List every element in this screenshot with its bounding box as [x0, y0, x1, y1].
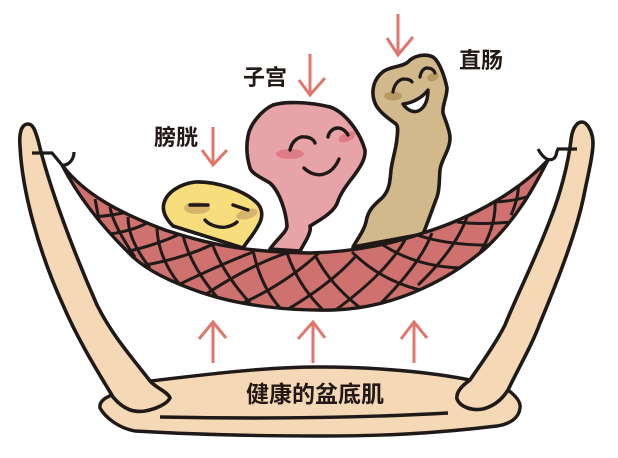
label: healthy pelvic floor muscles: 健康的盆底肌: [246, 381, 384, 407]
rectum blush: [384, 92, 402, 100]
base underline: [160, 413, 448, 418]
net mesh: [94, 187, 526, 308]
arrow: down bladder: [202, 127, 227, 165]
hammock net: [62, 160, 548, 314]
organ: bladder: [163, 182, 262, 248]
bladder blush: [184, 202, 210, 214]
organ: rectum: [353, 55, 450, 247]
left post: [20, 124, 170, 411]
right post: [457, 122, 593, 410]
label: bladder: 膀胱: [154, 125, 198, 150]
hammock outline: [62, 160, 548, 310]
arrow: up centre: [298, 322, 325, 363]
right hook: [538, 149, 577, 160]
arrow: down rectum: [387, 14, 413, 55]
bladder eyes and smile: [190, 205, 248, 227]
uterus eyes and smile: [290, 128, 348, 175]
rectum eyes: [393, 68, 435, 92]
arrow: up left: [199, 322, 226, 363]
pelvic floor base: [100, 367, 520, 436]
label: rectum: 直肠: [459, 48, 503, 73]
rectum smile: [403, 90, 428, 112]
organ: uterus: [247, 103, 365, 251]
uterus blush: [276, 149, 304, 159]
arrow: up right: [401, 322, 427, 363]
left hook: [32, 152, 74, 165]
arrow: down uterus: [299, 54, 325, 95]
label: uterus: 子宫: [243, 65, 287, 90]
